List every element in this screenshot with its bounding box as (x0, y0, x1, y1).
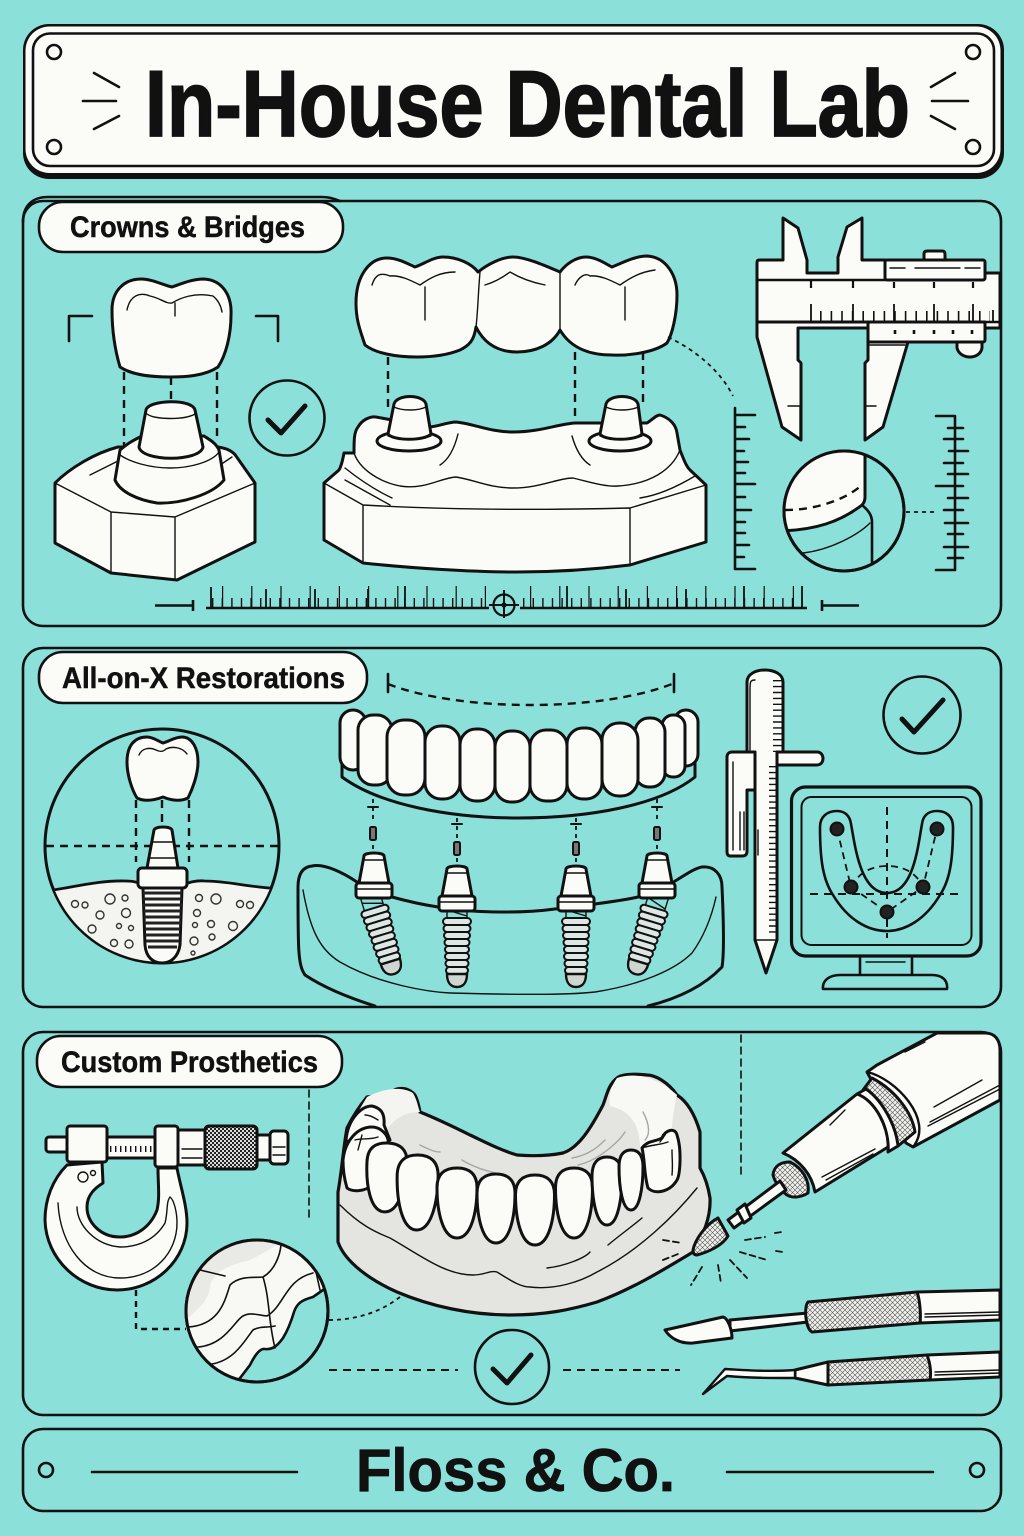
bottom ruler (155, 586, 859, 618)
side scale left (735, 408, 755, 569)
micrometer (45, 1126, 288, 1290)
full-arch prosthesis (340, 710, 698, 818)
caliper (757, 218, 1000, 440)
fixation screws (368, 799, 662, 865)
implant cross-section circle (40, 729, 285, 975)
detail magnifier: gum texture (180, 1235, 330, 1382)
detail magnifier: crown margin (775, 445, 904, 571)
planning monitor (792, 787, 981, 989)
implant model (298, 853, 724, 1006)
panel: custom prosthetics (23, 1032, 1001, 1415)
bridge on model (324, 256, 733, 572)
check badge (475, 1330, 549, 1404)
label pill: crowns and bridges: Crowns & Bridges (70, 211, 305, 244)
denture (338, 1074, 710, 1315)
side scale right (936, 416, 968, 570)
label pill: all-on-x (39, 652, 367, 703)
footer bar (23, 1429, 1001, 1511)
single crown on die (55, 279, 278, 580)
panel: crowns and bridges (23, 197, 1001, 626)
marking pen gauge (727, 670, 823, 973)
leader lines (136, 1290, 186, 1329)
carving instrument top (665, 1290, 1000, 1343)
check badge (250, 380, 324, 456)
label pill: all-on-x: All-on-X Restorations (62, 662, 345, 695)
brand name: Floss & Co. (356, 1437, 675, 1504)
label pill: crowns and bridges (39, 202, 343, 252)
handpiece drill (663, 1033, 1000, 1285)
label pill: custom prosthetics (37, 1036, 342, 1087)
panel: all-on-x restorations (23, 648, 1001, 1007)
check badge (884, 676, 960, 754)
guide lines (309, 1035, 741, 1222)
label pill: custom prosthetics: Custom Prosthetics (61, 1046, 318, 1079)
arch span dimension (388, 684, 672, 705)
explorer instrument bottom (703, 1352, 1000, 1394)
title banner (23, 24, 1004, 179)
